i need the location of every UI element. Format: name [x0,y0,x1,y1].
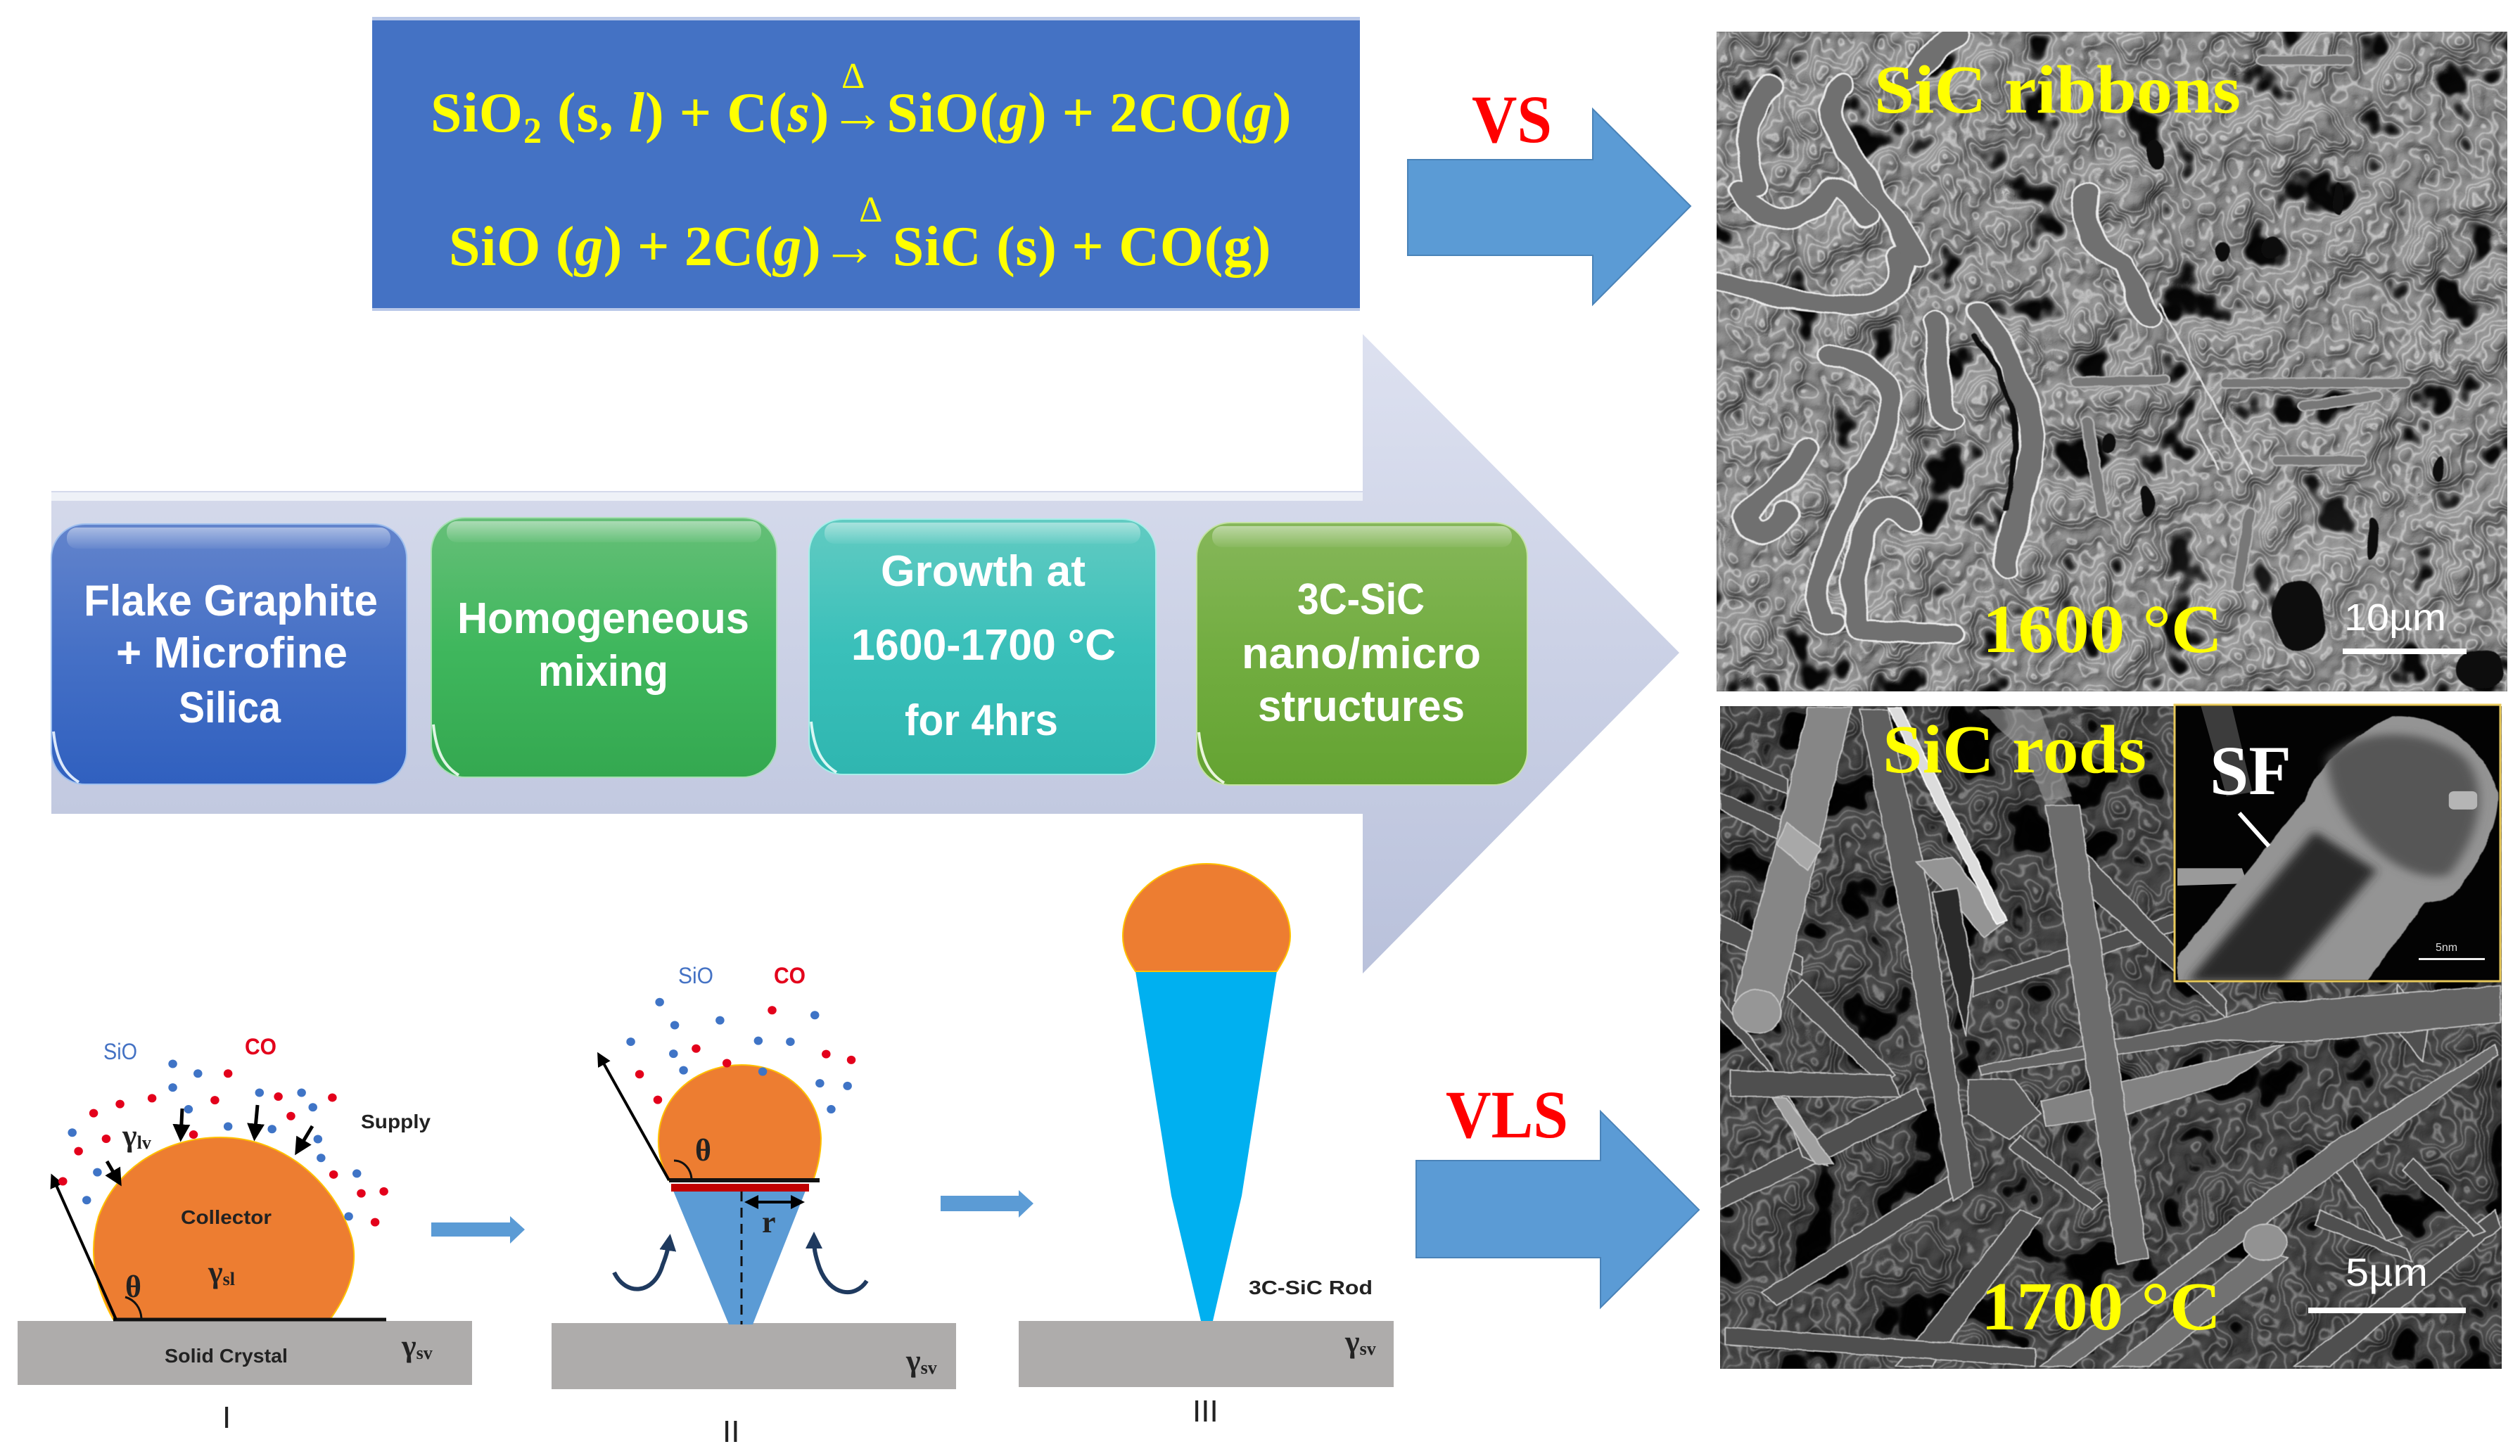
scale label: 10µm [2344,596,2446,639]
substrate label: Solid Crystal [165,1345,288,1367]
contact vector [599,1056,669,1180]
supply arrows [107,1105,312,1182]
droplet [658,1065,821,1180]
inset scale bar [2419,958,2485,960]
VLS diagram stage III [1019,864,1394,1429]
temperature label: 1700 °C [1981,1269,2221,1345]
VS label: VS [1472,82,1552,157]
baseline [113,1318,386,1321]
temperature label: 1600 °C [1983,592,2222,668]
scale bar [2308,1308,2466,1313]
molecules [626,998,855,1113]
VLS label: VLS [1446,1077,1568,1152]
card: product: 3C-SiC [1297,575,1425,624]
debris [1978,710,2071,800]
species labels: CO [774,963,806,988]
gamma sv: sv [921,1358,937,1378]
radius arrow [749,1201,801,1203]
dark pits [2099,140,2506,687]
equation 1: SiO [431,82,523,144]
theta: θ [695,1133,711,1168]
rod [1135,971,1277,1321]
rods [1720,748,2500,1367]
card: mixing: mixing [538,647,668,696]
card: growth conditions [809,519,1156,774]
species labels: CO [245,1034,276,1059]
angle arc [125,1297,141,1318]
substrate [18,1321,472,1385]
reaction equations panel [372,17,1360,311]
card: product: nano/micro [1242,630,1481,678]
step arrow I to II [431,1216,525,1244]
ribbons: bright edges [1720,34,2149,634]
gamma sv: γ [906,1343,921,1378]
card: raw materials: Flake Graphite [84,577,378,625]
card: raw materials: + Microfine [116,629,348,677]
stage number: III [1192,1394,1218,1429]
species labels: SiO [678,963,713,988]
species labels: SiO [103,1039,137,1064]
curved arrows [614,1240,867,1292]
step arrow II to III [941,1190,1033,1218]
card: growth conditions: for 4hrs [905,696,1058,745]
large process arrow [51,334,1679,973]
scale bar [2343,649,2467,654]
stage number: II [723,1415,739,1449]
gamma sv: sv [416,1343,433,1363]
molecules [58,1059,388,1227]
VLS diagram stage I [18,1034,472,1435]
cone [673,1191,806,1324]
gamma sv: γ [1345,1324,1360,1359]
equation 1: 2 [523,111,542,151]
card: mixing [431,518,777,777]
gamma sl: sl [223,1269,235,1289]
gamma sv: sv [1360,1339,1376,1359]
species labels [103,1034,276,1064]
dark crack [1973,334,2015,509]
gamma lv: γ [122,1118,137,1153]
species labels [678,963,806,988]
heat symbol 2: Δ [859,190,882,230]
supply label: Supply [361,1111,431,1132]
equation 1: l) + C(s)→SiO(g) + 2CO(g) [629,82,1292,144]
collector label: Collector [181,1206,272,1228]
straight rods [2077,60,2405,587]
VLS arrow [1416,1111,1699,1308]
stacking fault pointer [2239,813,2269,846]
inset micrograph [2175,705,2500,981]
card: raw materials: Silica [179,684,281,732]
SEM image: SiC rods [1720,705,2502,1369]
angle arc [674,1161,692,1179]
rod label: 3C-SiC Rod [1249,1277,1373,1298]
red interface [671,1184,809,1192]
tonal variation [2160,478,2413,647]
radius label: r [762,1205,776,1239]
card: growth conditions: 1600-1700 °C [851,621,1116,670]
card: mixing: Homogeneous [457,594,749,643]
rods title: SiC rods [1883,712,2146,788]
stage number: I [222,1400,231,1435]
collector droplet [94,1137,354,1320]
heat symbol 1: Δ [841,56,865,96]
substrate [552,1323,956,1389]
VS arrow [1408,109,1691,305]
stacking fault label: SF [2210,732,2291,810]
card: product [1197,523,1527,785]
equation 2: SiO (g) + 2C(g)→ SiC (s) + CO(g) [449,216,1271,278]
gamma lv: lv [137,1132,151,1153]
theta: θ [125,1270,141,1304]
baseline [669,1178,820,1182]
contact-angle vector [53,1177,116,1320]
VLS diagram stage II [552,963,956,1449]
inset scale label: 5nm [2436,942,2457,954]
ribbons title: SiC ribbons [1874,52,2241,128]
equation 1: (s, [542,82,629,144]
SEM image: SiC ribbons [1717,32,2507,691]
card: growth conditions: Growth at [881,547,1086,596]
scale label: 5µm [2346,1250,2428,1294]
gamma sv: γ [402,1329,416,1363]
gamma sl: γ [208,1255,223,1289]
droplet [1123,864,1290,971]
substrate [1019,1321,1394,1387]
card: raw materials [51,524,407,784]
card: product: structures [1258,682,1465,731]
dashed axis [740,1192,743,1324]
